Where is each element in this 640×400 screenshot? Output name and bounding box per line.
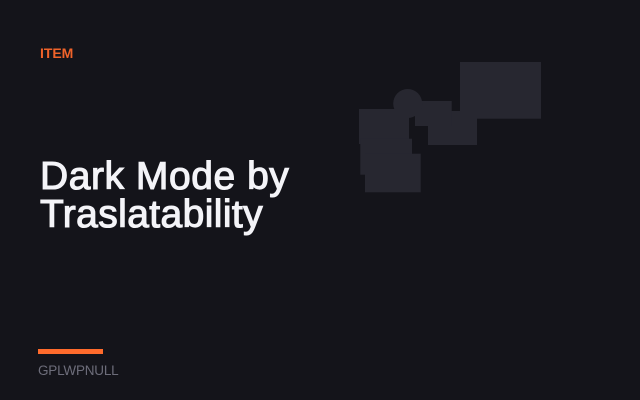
category label: ITEM xyxy=(40,45,73,61)
title: Dark Mode by xyxy=(40,155,289,198)
title xyxy=(40,155,290,236)
footer label: GPLWPNULL xyxy=(38,363,118,378)
accent bar xyxy=(38,349,103,354)
title: Traslatability xyxy=(40,193,263,236)
